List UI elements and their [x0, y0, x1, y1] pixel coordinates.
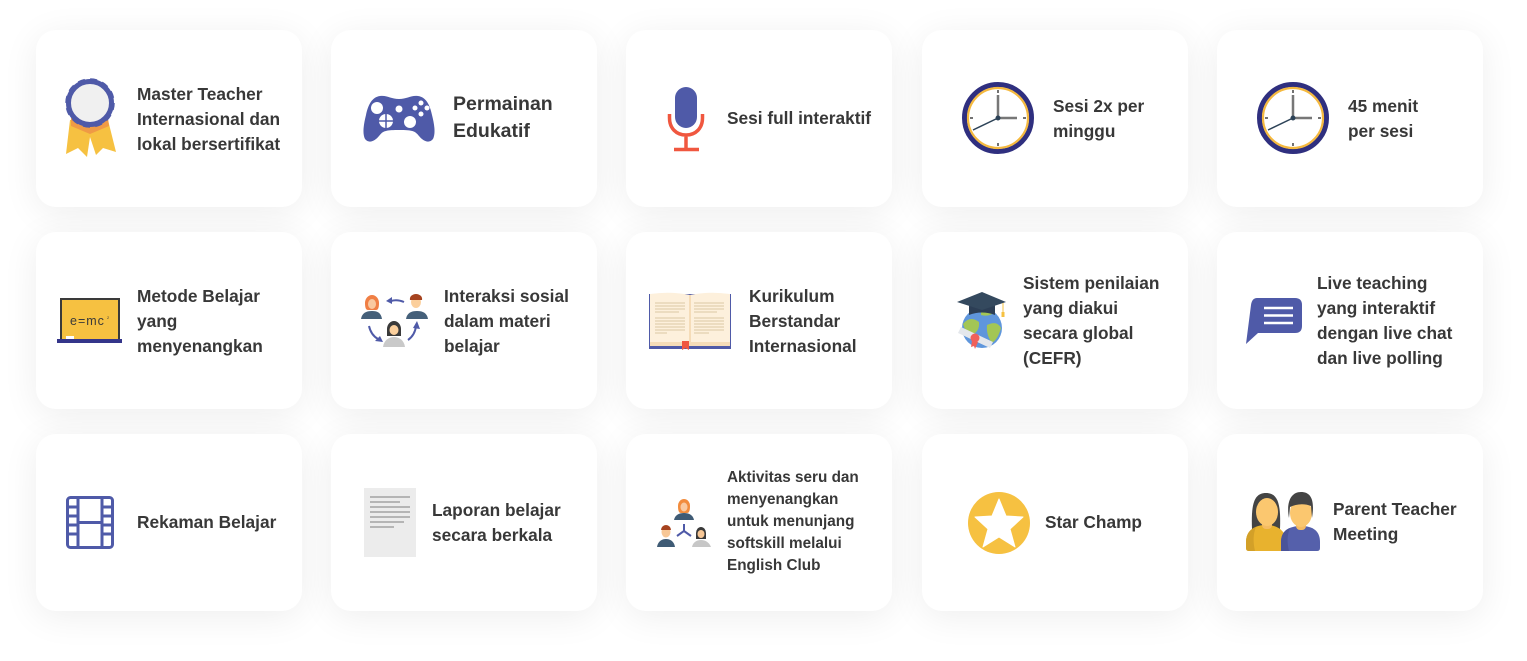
panel: Interaksi sosial — [331, 232, 597, 409]
text: Kurikulum — [749, 286, 834, 306]
text: Rekaman Belajar — [137, 512, 276, 532]
text: Sesi 2x per — [1053, 96, 1144, 116]
icon: report document — [364, 488, 416, 557]
icon: game controller — [363, 96, 434, 142]
text: yang — [137, 311, 177, 331]
text: 45 menit — [1348, 96, 1418, 116]
text — [453, 93, 553, 142]
icon: clock — [1257, 82, 1329, 154]
text: dalam materi — [444, 311, 551, 331]
text — [727, 469, 859, 574]
text: untuk menunjang — [727, 513, 854, 530]
panel: Live teaching — [1217, 232, 1483, 409]
text — [1348, 96, 1418, 141]
text: Aktivitas seru dan — [727, 469, 859, 486]
icon: open book — [649, 292, 731, 350]
text: Parent Teacher — [1333, 499, 1457, 519]
text: menyenangkan — [727, 491, 838, 508]
text: (CEFR) — [1023, 348, 1082, 368]
panel: Star Champ — [922, 434, 1188, 611]
text: dengan live chat — [1317, 323, 1452, 343]
panel: 45 menit per sesi — [1217, 30, 1483, 207]
icon: microphone — [668, 87, 704, 152]
text: secara global — [1023, 323, 1133, 343]
icon: blackboard — [57, 298, 122, 343]
text — [1023, 273, 1159, 368]
icon: globe with graduation cap — [957, 292, 1006, 349]
panel: Laporan belajar — [331, 434, 597, 611]
text: Live teaching — [1317, 273, 1427, 293]
panel: Permainan Edukatif — [331, 30, 597, 207]
icon: star badge — [968, 492, 1030, 554]
text: belajar — [444, 336, 500, 356]
panel: Metode Belajar — [36, 232, 302, 409]
icon: film strip — [66, 496, 114, 549]
icon: clock — [962, 82, 1034, 154]
panel: Sesi 2x per minggu — [922, 30, 1188, 207]
text: dan live polling — [1317, 348, 1443, 368]
text — [1053, 96, 1144, 141]
text — [432, 500, 561, 545]
panel: Sesi full interaktif — [626, 30, 892, 207]
panel: Sistem penilaian — [922, 232, 1188, 409]
icon: three people — [657, 499, 711, 547]
text — [137, 84, 280, 154]
text: Internasional — [749, 336, 857, 356]
panel: Rekaman Belajar — [36, 434, 302, 611]
text: Edukatif — [453, 120, 530, 142]
text — [444, 286, 569, 356]
panel: Kurikulum — [626, 232, 892, 409]
text: minggu — [1053, 121, 1115, 141]
text: Berstandar — [749, 311, 840, 331]
text: Interaksi sosial — [444, 286, 569, 306]
panel: Parent Teacher Meeting — [1217, 434, 1483, 611]
icon: parents — [1246, 492, 1320, 551]
icon: medal — [65, 78, 116, 157]
panel: Aktivitas seru — [626, 434, 892, 611]
icon: blackboard: e=mc — [70, 314, 105, 328]
text: menyenangkan — [137, 336, 263, 356]
text — [1317, 273, 1452, 368]
text: Permainan — [453, 93, 553, 115]
text: yang interaktif — [1317, 298, 1435, 318]
text: English Club — [727, 557, 820, 574]
text: Master Teacher — [137, 84, 263, 104]
icon: blackboard: 2 — [107, 315, 110, 320]
text: Star Champ — [1045, 512, 1142, 532]
text: Sesi full interaktif — [727, 108, 871, 128]
icon: chat bubble — [1246, 298, 1302, 344]
text — [137, 286, 263, 356]
text: Sistem penilaian — [1023, 273, 1159, 293]
text: yang diakui — [1023, 298, 1118, 318]
text: Metode Belajar — [137, 286, 260, 306]
text: softskill melalui — [727, 535, 842, 552]
text: Internasional dan — [137, 109, 280, 129]
text: Laporan belajar — [432, 500, 561, 520]
text: Meeting — [1333, 524, 1398, 544]
text: lokal bersertifikat — [137, 134, 280, 154]
icon: people exchange — [361, 294, 428, 347]
text: secara berkala — [432, 525, 552, 545]
text — [749, 286, 857, 356]
panel: Master Teacher — [36, 30, 302, 207]
text: per sesi — [1348, 121, 1413, 141]
text — [1333, 499, 1457, 544]
